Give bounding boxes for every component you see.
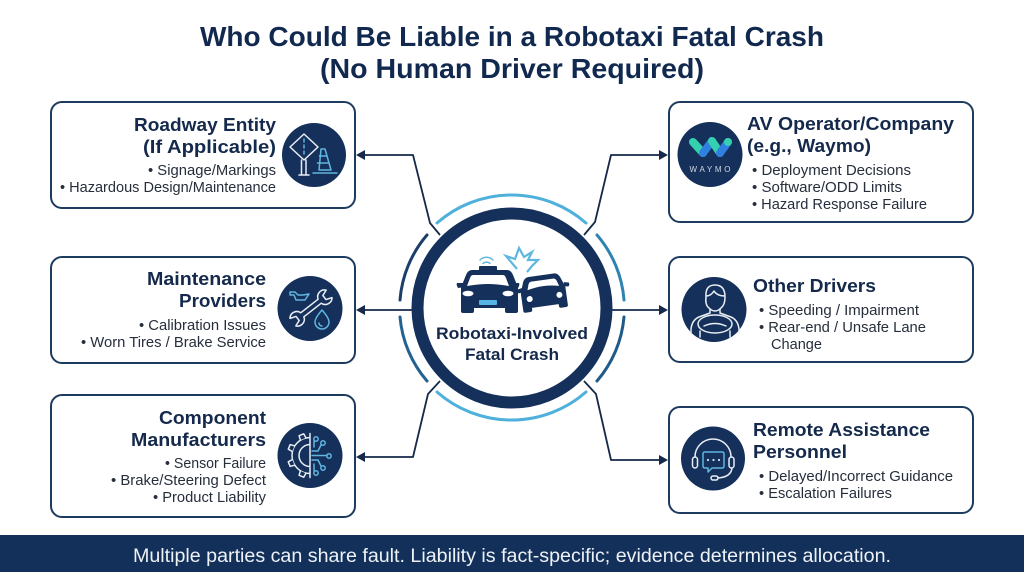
heading: Manufacturers bbox=[131, 430, 266, 450]
bullets: • Rear-end / Unsafe Lane bbox=[759, 319, 926, 336]
icon: waymo logo: WAYMO bbox=[690, 165, 730, 174]
bullets: • Sensor Failure bbox=[165, 455, 266, 472]
center label: Fatal Crash bbox=[465, 345, 559, 364]
panel: remote assistance personnel bbox=[669, 407, 973, 513]
heading bbox=[753, 420, 930, 462]
bullets: • Speeding / Impairment bbox=[759, 302, 920, 319]
bullets: • Signage/Markings bbox=[148, 162, 276, 179]
outer arcs bbox=[400, 195, 624, 420]
bullets: • Calibration Issues bbox=[139, 317, 266, 334]
bullets: • Hazardous Design/Maintenance bbox=[60, 179, 276, 196]
bullets bbox=[759, 468, 953, 502]
bullets: • Product Liability bbox=[153, 489, 266, 506]
bullets: Change bbox=[771, 336, 822, 353]
bullets bbox=[752, 162, 927, 213]
bullets bbox=[759, 302, 926, 353]
heading: Providers bbox=[179, 291, 266, 311]
bullets: • Delayed/Incorrect Guidance bbox=[759, 468, 953, 485]
connectors with arrows bbox=[356, 150, 668, 465]
heading bbox=[134, 115, 276, 157]
heading: (If Applicable) bbox=[143, 137, 276, 157]
panel: roadway entity bbox=[51, 102, 355, 208]
heading: Roadway Entity bbox=[134, 115, 276, 135]
bullets bbox=[111, 455, 267, 506]
title: (No Human Driver Required) bbox=[320, 53, 704, 84]
icon: road sign and cone bbox=[282, 123, 346, 187]
icon: gear and circuit bbox=[278, 423, 342, 488]
icon: waymo logo bbox=[678, 122, 742, 187]
heading: (e.g., Waymo) bbox=[747, 136, 871, 156]
icon: robotaxi bbox=[457, 257, 519, 313]
panel: component manufacturers bbox=[51, 395, 355, 517]
icon: oil can, wrench and drop bbox=[278, 276, 342, 341]
panel: av operator/company bbox=[669, 102, 973, 222]
icon: headset with chat bubble bbox=[681, 426, 745, 490]
bullets: • Deployment Decisions bbox=[752, 162, 911, 179]
bullets: • Worn Tires / Brake Service bbox=[81, 334, 266, 351]
bullets: • Escalation Failures bbox=[759, 485, 892, 502]
central hub: robotaxi-involved fatal crash bbox=[400, 195, 624, 420]
heading bbox=[147, 269, 266, 311]
heading: Personnel bbox=[753, 442, 847, 462]
heading: Component bbox=[159, 408, 266, 428]
heading bbox=[131, 408, 266, 450]
heading: Remote Assistance bbox=[753, 420, 930, 440]
footer banner: Multiple parties can share fault. Liability is fact-specific; evidence determines allocation. bbox=[133, 546, 891, 567]
bullets: • Software/ODD Limits bbox=[752, 179, 902, 196]
icon: driver at steering wheel bbox=[682, 277, 746, 342]
panel: other drivers bbox=[669, 257, 973, 362]
icon: impact burst bbox=[506, 248, 538, 272]
icon: other car bbox=[515, 272, 572, 313]
center label: Robotaxi-Involved bbox=[436, 324, 588, 343]
center label bbox=[436, 324, 588, 364]
bullets: • Hazard Response Failure bbox=[752, 196, 927, 213]
heading: Maintenance bbox=[147, 269, 266, 289]
bullets bbox=[81, 317, 266, 351]
footer banner bbox=[0, 535, 1024, 572]
bullets: • Brake/Steering Defect bbox=[111, 472, 267, 489]
heading bbox=[747, 114, 954, 156]
title bbox=[200, 21, 824, 84]
heading: AV Operator/Company bbox=[747, 114, 954, 134]
ring bbox=[418, 214, 606, 402]
title: Who Could Be Liable in a Robotaxi Fatal Crash bbox=[200, 21, 824, 52]
panel: maintenance providers bbox=[51, 257, 355, 363]
heading: Other Drivers bbox=[753, 276, 876, 296]
bullets bbox=[60, 162, 276, 196]
